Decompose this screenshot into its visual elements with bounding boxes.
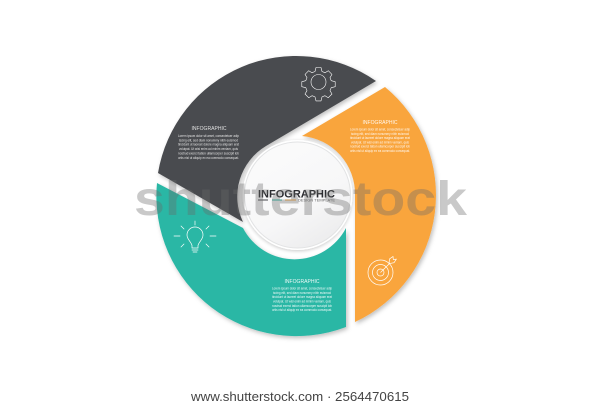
heading: teal segment: INFOGRAPHIC [284,279,320,285]
text block: orange segment: volutpat. Ut wisi enim ad minim veniam, quis [351,140,409,144]
text block: dark segment: volutpat. Ut wisi enim ad minim veniam, quis [179,147,238,151]
center title: INFOGRAPHIC [258,188,335,200]
text block: orange segment: iscing elit, sed diam nonummy nibh euismod [351,132,409,136]
heading: orange segment: INFOGRAPHIC [362,120,398,126]
watermark: shutterstock [134,173,467,226]
icon: target [368,256,396,285]
icon: gear [302,68,335,101]
center subtitle lines: DESIGN TEMPLATE [298,198,335,202]
text block: orange segment: ortis nisl ut aliquip ex ea commodo consequat. [350,149,410,153]
text block: teal segment: tincidunt ut laoreet dolore magna aliquam erat [272,295,332,299]
text block: teal segment [272,286,332,312]
text block: dark segment: nostrud exerci tation ullamcorper suscipit lob [178,151,239,155]
text block: orange segment: Lorem ipsum dolor sit amet, consectetuer adip [350,128,410,132]
text block: dark segment: tincidunt ut laoreet dolore magna aliquam erat [178,143,239,147]
text block: dark segment: iscing elit, sed diam nonummy nibh euismod [179,138,238,142]
text block: orange segment: nostrud exerci tation ullamcorper suscipit lob [350,145,410,149]
text block: dark segment: Lorem ipsum dolor sit amet, consectetuer adip [178,134,239,138]
footer credit: www.shutterstock.com · 2564470615 [190,390,409,404]
text block: dark segment [178,134,239,160]
text block: orange segment [350,128,410,153]
heading: dark segment: INFOGRAPHIC [192,126,227,132]
text block: dark segment: ortis nisl ut aliquip ex ea commodo consequat. [178,156,239,160]
center circle [242,140,352,250]
icon: light bulb [174,221,216,252]
panel: dark segment [158,56,376,222]
text block: teal segment: iscing elit, sed diam nonummy nibh euismod [273,291,331,295]
text block: teal segment: nostrud exerci tation ullamcorper suscipit lob [272,304,332,308]
panel: teal segment [156,183,346,336]
text block: teal segment: Lorem ipsum dolor sit amet, consectetuer adip [272,286,332,290]
panel: orange segment [302,87,436,322]
text block: orange segment: tincidunt ut laoreet dolore magna aliquam erat [350,136,410,140]
text block: teal segment: volutpat. Ut wisi enim ad minim veniam, quis [273,300,331,304]
text block: teal segment: ortis nisl ut aliquip ex ea commodo consequat. [272,308,332,312]
